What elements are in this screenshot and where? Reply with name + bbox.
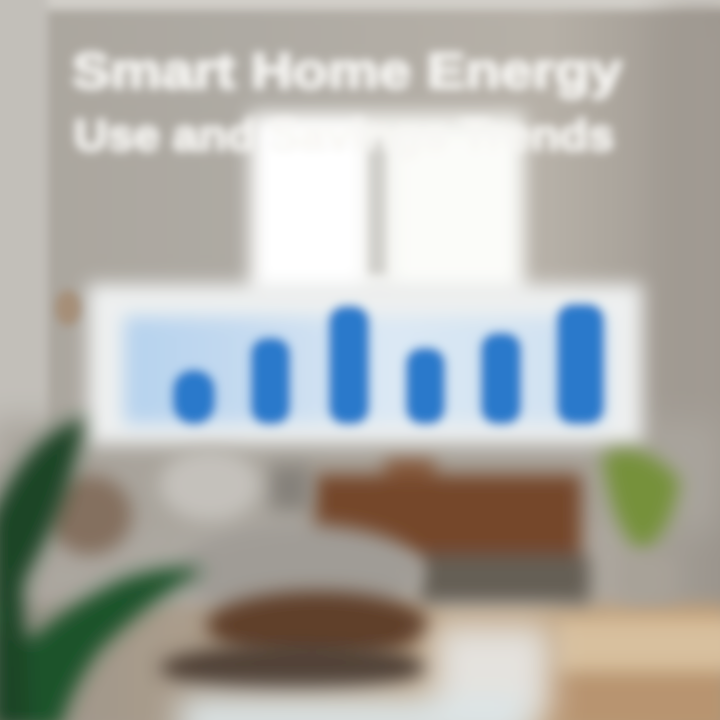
- sofa brown seat: [206, 591, 430, 659]
- title text: [72, 43, 622, 160]
- white rug: [180, 625, 550, 720]
- sofa shadow: [160, 644, 430, 692]
- panel: light blue chart area: [124, 316, 608, 424]
- panel: white backing: [88, 284, 642, 444]
- sofa: [48, 449, 430, 692]
- window mullion: [368, 140, 386, 275]
- title text: Use and Savings Trends: [74, 111, 614, 160]
- window: [250, 112, 525, 302]
- wall hook ornament: [55, 290, 81, 326]
- chart panel: [88, 284, 642, 444]
- wood console: [314, 458, 590, 603]
- bar chart: [173, 304, 604, 424]
- plant: right potted: [602, 449, 680, 600]
- title text: Smart Home Energy: [72, 43, 622, 99]
- sofa cushions: [48, 449, 422, 616]
- plant: left foreground leaves: [0, 418, 205, 720]
- floor: [0, 605, 720, 720]
